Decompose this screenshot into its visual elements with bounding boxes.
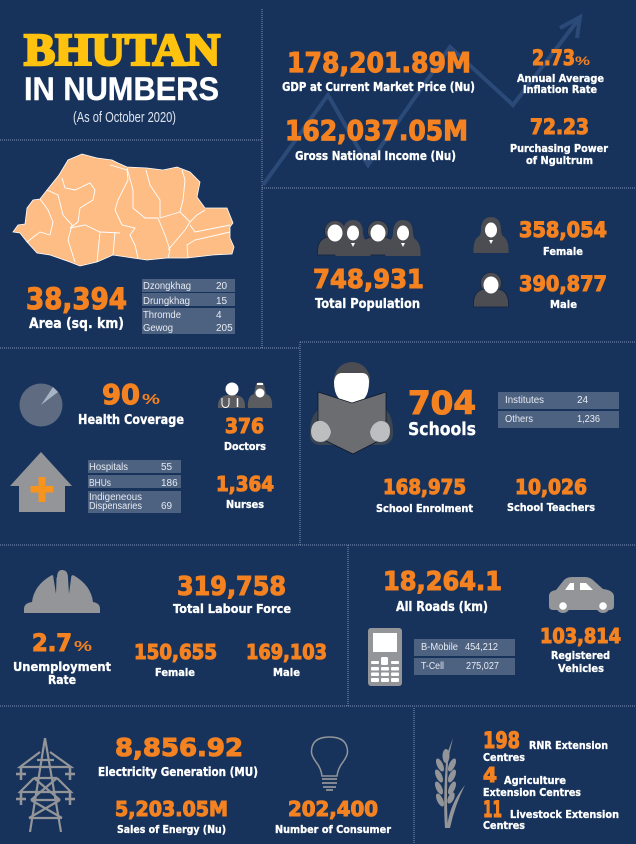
- table: administrative units: 4: [216, 310, 222, 321]
- icon: health facility: [10, 452, 72, 512]
- label: vehicles: [551, 649, 610, 675]
- table: mobile subscribers: T-Cell: [421, 661, 444, 672]
- table: health facilities: Indigeneous: [89, 492, 142, 503]
- table: administrative units: Dzongkhag: [143, 281, 191, 292]
- label: unemployment: Rate: [48, 673, 76, 687]
- label: teachers: School Teachers: [507, 501, 595, 514]
- label: purchasing power: Purchasing Power: [510, 142, 608, 155]
- stat: vehicles: 103,814: [540, 624, 621, 648]
- label: GDP: GDP at Current Market Price (Nu): [282, 80, 475, 94]
- label: roads: All Roads (km): [396, 600, 488, 615]
- panel: labour: [13, 570, 327, 687]
- icon: doctor and nurse: [218, 382, 272, 408]
- icon: pie chart: [20, 384, 62, 426]
- table: health facilities: 55: [161, 462, 173, 473]
- stat: livestock centres: 11: [483, 798, 502, 823]
- label: electricity generation: Electricity Generation (MU): [98, 765, 258, 779]
- table: administrative units: Drungkhag: [143, 296, 190, 307]
- table: health facilities: 186: [161, 478, 178, 489]
- icon: female: [473, 217, 509, 253]
- label: RNR centres: [483, 739, 608, 764]
- label: female workers: Female: [155, 666, 195, 679]
- stat: labour force: 319,758: [177, 572, 286, 602]
- title: in numbers: IN NUMBERS: [24, 71, 219, 107]
- stat: nurses: 1,364: [216, 472, 274, 496]
- panel: title: [24, 25, 220, 126]
- label: livestock centres: Centres: [483, 819, 525, 832]
- label: livestock centres: [483, 808, 619, 832]
- title: Bhutan: BHUTAN: [24, 25, 220, 75]
- unit: percent: %: [575, 54, 590, 68]
- table: other institutions: Institutes: [505, 395, 544, 406]
- label: unemployment: Unemployment: [13, 660, 111, 674]
- label: purchasing power: of Ngultrum: [526, 154, 593, 167]
- stat: consumers: 202,400: [288, 797, 378, 821]
- panel: transport and telecom: [368, 567, 621, 686]
- icon: wheat: [433, 738, 465, 828]
- stat: roads: 18,264.1: [383, 567, 502, 597]
- stat: RNR centres: 198: [483, 729, 520, 754]
- arrow: rising trend line: [263, 17, 580, 185]
- icon: light bulb: [311, 737, 348, 790]
- table: administrative units: Thromde: [143, 310, 181, 321]
- label: agriculture centres: [483, 774, 581, 799]
- table: health facilities: BHUs: [89, 478, 111, 489]
- stat: enrolment: 168,975: [383, 475, 466, 499]
- table: other institutions: 1,236: [577, 414, 600, 425]
- stat: doctors: 376: [225, 414, 264, 438]
- table: health facilities: Hospitals: [89, 462, 128, 473]
- stat: teachers: 10,026: [515, 475, 587, 499]
- label: inflation: Inflation Rate: [523, 83, 597, 96]
- stat: GNI: 162,037.05M: [285, 115, 468, 147]
- stat: electricity generation: 8,856.92: [115, 733, 243, 762]
- label: male: Male: [550, 298, 577, 311]
- icon: hard hat: [24, 570, 100, 613]
- table: other institutions: Others: [505, 414, 533, 425]
- stat: unemployment: 2.7: [32, 629, 72, 657]
- table: mobile subscribers: [414, 639, 515, 675]
- label: male workers: Male: [273, 666, 300, 679]
- label: RNR centres: Centres: [483, 751, 525, 764]
- map of Bhutan: [13, 154, 234, 266]
- stat: inflation: 2.73: [532, 46, 575, 70]
- stat: GDP: 178,201.89M: [287, 47, 471, 79]
- stat: purchasing power: 72.23: [530, 115, 589, 139]
- label: female: Female: [543, 245, 583, 258]
- label: total population: Total Population: [315, 297, 420, 312]
- table: health facilities: 69: [161, 501, 173, 512]
- label: agriculture centres: Extension Centres: [483, 786, 581, 799]
- label: sales of energy: Sales of Energy (Nu): [117, 823, 226, 836]
- icon: car: [549, 577, 614, 613]
- panel: area and map: [13, 154, 235, 334]
- stat: agriculture centres: 4: [483, 763, 497, 787]
- stat: male workers: 169,103: [246, 640, 327, 664]
- table: administrative units: [142, 279, 235, 334]
- label: vehicles: Vehicles: [558, 662, 604, 675]
- label: RNR centres: RNR Extension: [529, 739, 608, 752]
- label: labour force: Total Labour Force: [173, 602, 291, 616]
- icon: transmission tower: [16, 738, 75, 832]
- stat: sales of energy: 5,203.05M: [115, 797, 228, 821]
- label: nurses: Nurses: [226, 498, 264, 511]
- table: other institutions: [498, 392, 619, 428]
- stat: total population: 748,931: [313, 265, 424, 295]
- stat: schools: 704: [408, 384, 476, 422]
- stat: area: 38,394: [26, 282, 127, 316]
- label: doctors: Doctors: [224, 440, 266, 453]
- table: administrative units: 15: [216, 296, 228, 307]
- label: inflation: [517, 72, 604, 96]
- table: administrative units: 20: [216, 281, 228, 292]
- table: health facilities: [88, 460, 181, 513]
- stat: female: 358,054: [519, 218, 607, 242]
- unit: percent: %: [74, 638, 92, 655]
- label: inflation: Annual Average: [517, 72, 604, 85]
- panel: health: [10, 378, 274, 513]
- table: mobile subscribers: 454,212: [465, 642, 498, 653]
- label: area: Area (sq. km): [29, 316, 124, 332]
- icon: mobile phone: [368, 628, 402, 686]
- label: purchasing power: [510, 142, 608, 167]
- icon: population group: [317, 220, 421, 256]
- panel: agriculture: [433, 729, 619, 832]
- label: agriculture centres: Agriculture: [504, 774, 566, 787]
- label: consumers: Number of Consumer: [275, 823, 392, 836]
- label: enrolment: School Enrolment: [376, 502, 473, 515]
- stat: health coverage: 90: [102, 378, 140, 411]
- icon: person reading: [310, 362, 393, 454]
- table: mobile subscribers: 275,027: [466, 661, 499, 672]
- label: unemployment: [13, 660, 111, 687]
- panel: education: [310, 362, 619, 515]
- label: GNI: Gross National Income (Nu): [295, 149, 456, 163]
- table: other institutions: 24: [577, 395, 589, 406]
- table: administrative units: 205: [216, 323, 233, 334]
- label: health coverage: Health Coverage: [78, 413, 184, 428]
- label: livestock centres: Livestock Extension: [510, 808, 619, 821]
- stat: female workers: 150,655: [134, 640, 217, 664]
- panel: economy: [263, 17, 608, 185]
- label: schools: Schools: [408, 419, 476, 440]
- panel: population: [313, 217, 607, 312]
- icon: male: [473, 272, 509, 307]
- table: health facilities: Dispensaries: [89, 501, 142, 512]
- panel: energy: [16, 733, 392, 836]
- label: vehicles: Registered: [551, 649, 610, 662]
- unit: percent: %: [142, 391, 160, 408]
- subtitle: date: (As of October 2020): [73, 109, 176, 126]
- stat: male: 390,877: [519, 272, 607, 296]
- table: administrative units: Gewog: [143, 323, 173, 334]
- table: mobile subscribers: B-Mobile: [421, 642, 458, 653]
